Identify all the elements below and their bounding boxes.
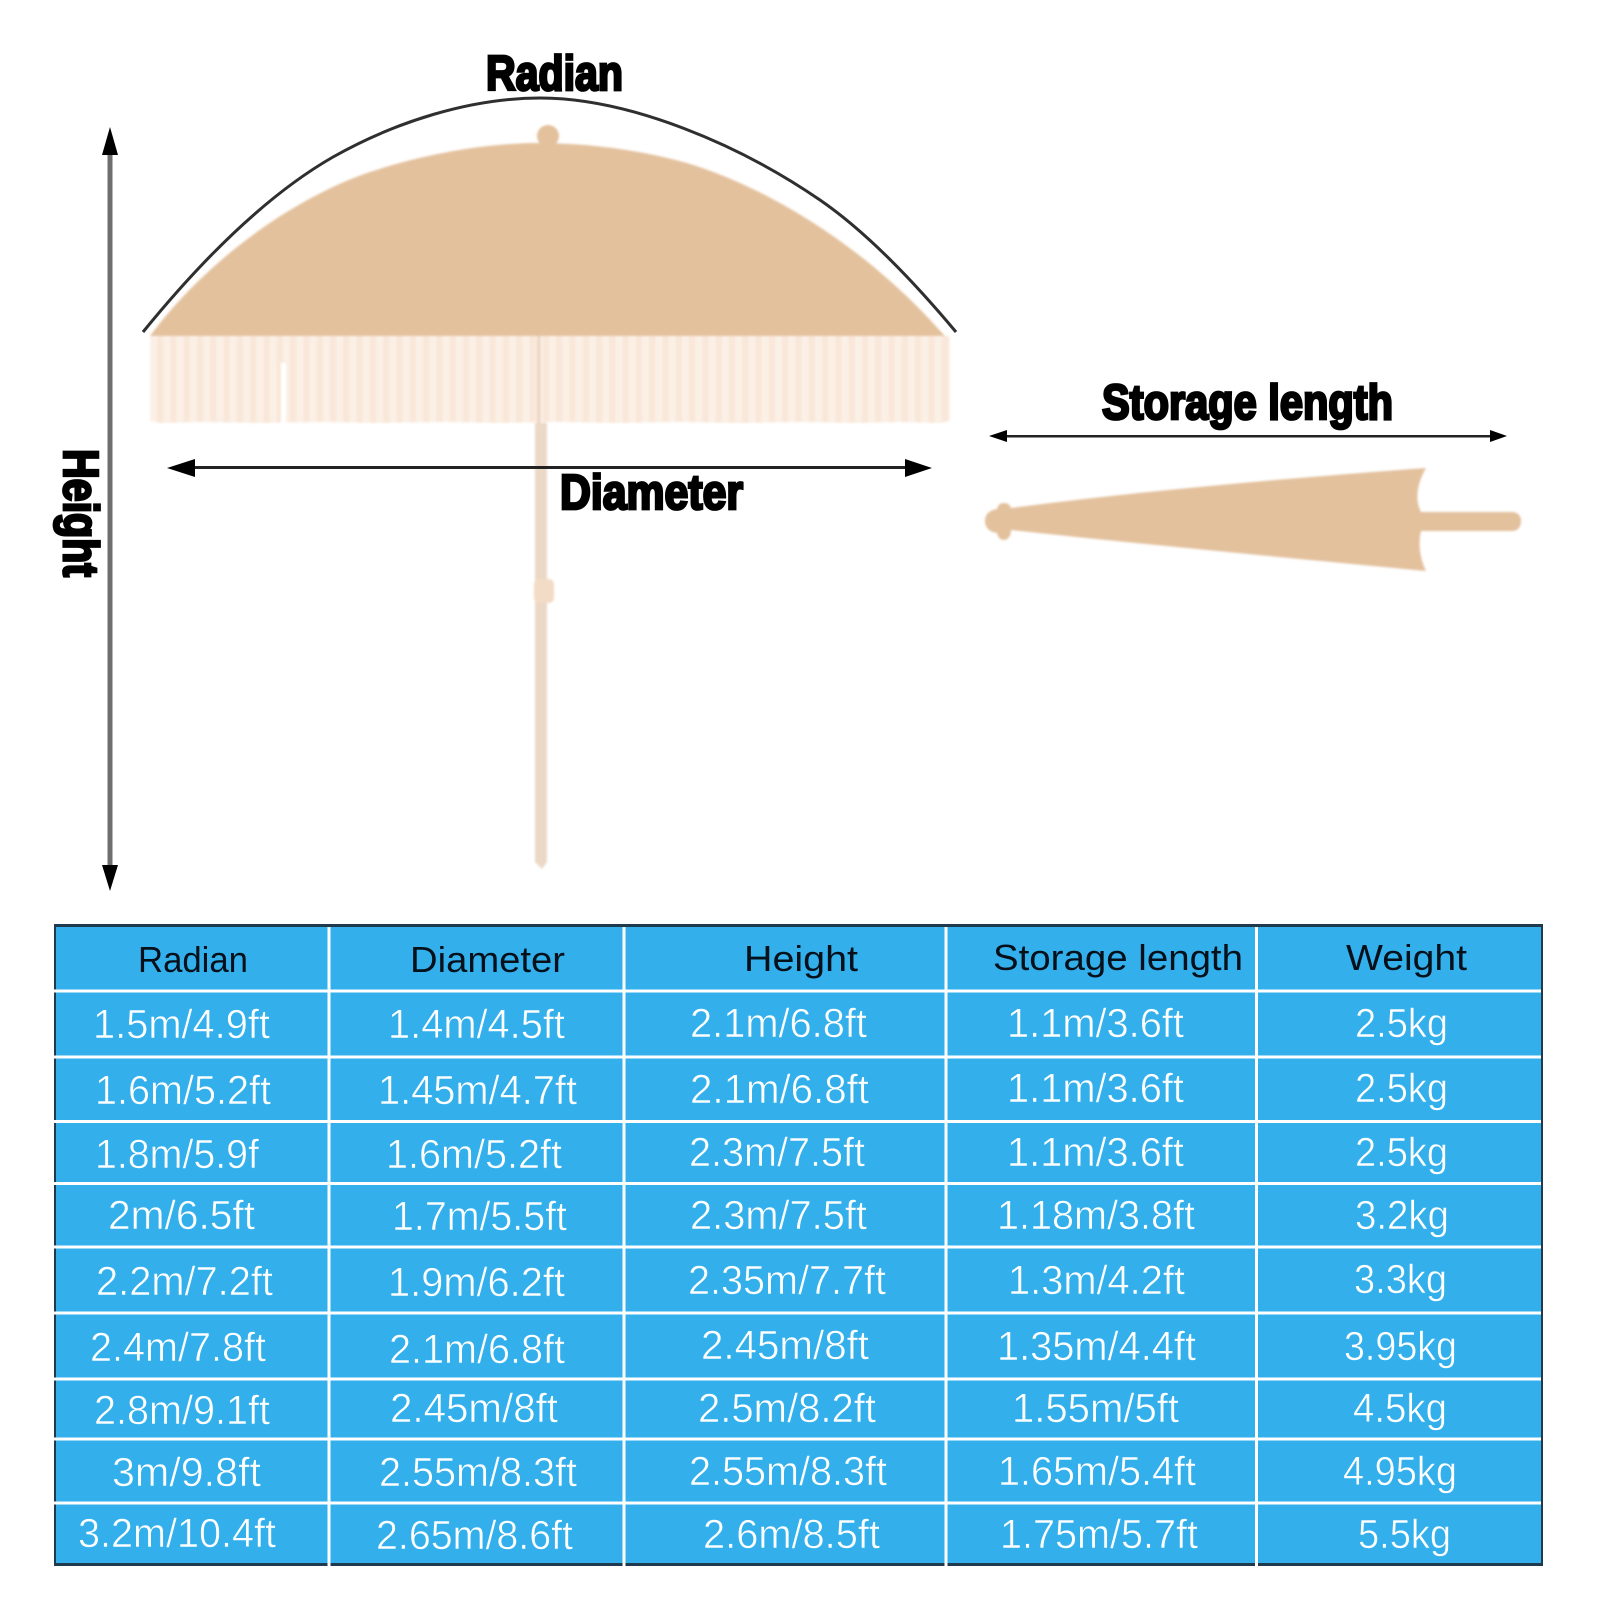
table grid lines	[54, 927, 1541, 1566]
table row 1: 2.5kg	[1355, 1000, 1448, 1046]
table row 7: 2.8m/9.1ft	[94, 1387, 271, 1433]
table row 2	[95, 1065, 1448, 1113]
table row 6: 2.1m/6.8ft	[389, 1326, 566, 1372]
table row 8	[112, 1448, 1457, 1495]
label: Diameter: Diameter	[560, 466, 743, 520]
table row 2: 1.1m/3.6ft	[1007, 1065, 1185, 1111]
table row 9: 3.2m/10.4ft	[78, 1510, 277, 1556]
open umbrella illustration	[150, 125, 950, 869]
table row 1: 2.1m/6.8ft	[690, 1000, 868, 1046]
pole line inside fringe	[537, 336, 540, 424]
table row 8: 2.55m/8.3ft	[689, 1448, 888, 1494]
table row 6: 2.45m/8ft	[701, 1322, 870, 1368]
table header row	[138, 937, 1467, 980]
table row 7: 2.5m/8.2ft	[698, 1385, 877, 1431]
table row 6: 3.95kg	[1344, 1323, 1457, 1369]
table row 5: 1.3m/4.2ft	[1008, 1257, 1186, 1303]
table row 4: 1.7m/5.5ft	[392, 1193, 568, 1239]
table row 8: 1.65m/5.4ft	[998, 1448, 1197, 1494]
table row 9	[78, 1510, 1451, 1558]
table row 4	[108, 1192, 1449, 1239]
table row 3: 2.5kg	[1355, 1129, 1448, 1175]
table row 5	[96, 1256, 1447, 1305]
table row 1: 1.5m/4.9ft	[93, 1001, 271, 1047]
table row 5: 3.3kg	[1354, 1256, 1447, 1302]
table row 6: 1.35m/4.4ft	[997, 1323, 1197, 1369]
table row 9: 1.75m/5.7ft	[1000, 1511, 1199, 1557]
table row 3: 1.1m/3.6ft	[1007, 1129, 1185, 1175]
table row 3: 1.6m/5.2ft	[386, 1131, 563, 1177]
radian arc	[143, 98, 956, 332]
closed umbrella illustration	[985, 468, 1521, 571]
table row 3	[95, 1129, 1448, 1177]
table row 6: 2.4m/7.8ft	[90, 1324, 267, 1370]
table fill	[56, 927, 1541, 1563]
table background	[54, 924, 1543, 1566]
table row 1: 1.4m/4.5ft	[388, 1001, 566, 1047]
table row 8: 3m/9.8ft	[112, 1449, 262, 1495]
table row 7	[94, 1385, 1447, 1433]
pole joint	[534, 579, 554, 603]
table row 4: 2.3m/7.5ft	[690, 1192, 868, 1238]
table row 2: 1.45m/4.7ft	[378, 1067, 578, 1113]
table row 7: 4.5kg	[1353, 1385, 1447, 1431]
canopy	[150, 143, 945, 336]
table header row: Weight	[1346, 937, 1467, 978]
table header row: Storage length	[993, 937, 1243, 978]
table row 1: 1.1m/3.6ft	[1007, 1000, 1185, 1046]
table row 8: 4.95kg	[1343, 1448, 1457, 1494]
storage length arrow	[989, 430, 1507, 442]
table row 5: 2.35m/7.7ft	[688, 1257, 887, 1303]
table header row: Height	[744, 938, 858, 979]
label: Storage length: Storage length	[1102, 376, 1393, 430]
umbrella fringe	[150, 336, 950, 423]
table row 9: 2.65m/8.6ft	[376, 1512, 574, 1558]
label: Radian: Radian	[486, 47, 623, 101]
table row 4: 2m/6.5ft	[108, 1192, 256, 1238]
table row 5: 1.9m/6.2ft	[388, 1259, 566, 1305]
table row 8: 2.55m/8.3ft	[379, 1449, 578, 1495]
table row 5: 2.2m/7.2ft	[96, 1258, 274, 1304]
table header row: Radian	[138, 939, 248, 980]
table row 4: 3.2kg	[1355, 1192, 1449, 1238]
table row 9: 2.6m/8.5ft	[703, 1511, 881, 1557]
table row 6	[90, 1322, 1457, 1372]
fringe gap	[281, 363, 286, 424]
table row 9: 5.5kg	[1358, 1511, 1451, 1557]
table row 3: 2.3m/7.5ft	[689, 1129, 866, 1175]
table row 4: 1.18m/3.8ft	[997, 1192, 1196, 1238]
size table	[54, 924, 1543, 1566]
table row 1	[93, 1000, 1448, 1047]
table row 2: 2.1m/6.8ft	[690, 1066, 870, 1112]
height arrow	[102, 127, 118, 891]
table row 7: 2.45m/8ft	[390, 1385, 559, 1431]
table row 3: 1.8m/5.9f	[95, 1131, 260, 1177]
umbrella pole	[535, 423, 547, 869]
table row 2: 1.6m/5.2ft	[95, 1067, 272, 1113]
top knob	[537, 125, 559, 147]
label: Height: Height	[53, 449, 107, 577]
table row 2: 2.5kg	[1355, 1065, 1448, 1111]
table header row: Diameter	[410, 939, 565, 980]
table row 7: 1.55m/5ft	[1012, 1385, 1180, 1431]
diameter arrow	[167, 459, 932, 477]
